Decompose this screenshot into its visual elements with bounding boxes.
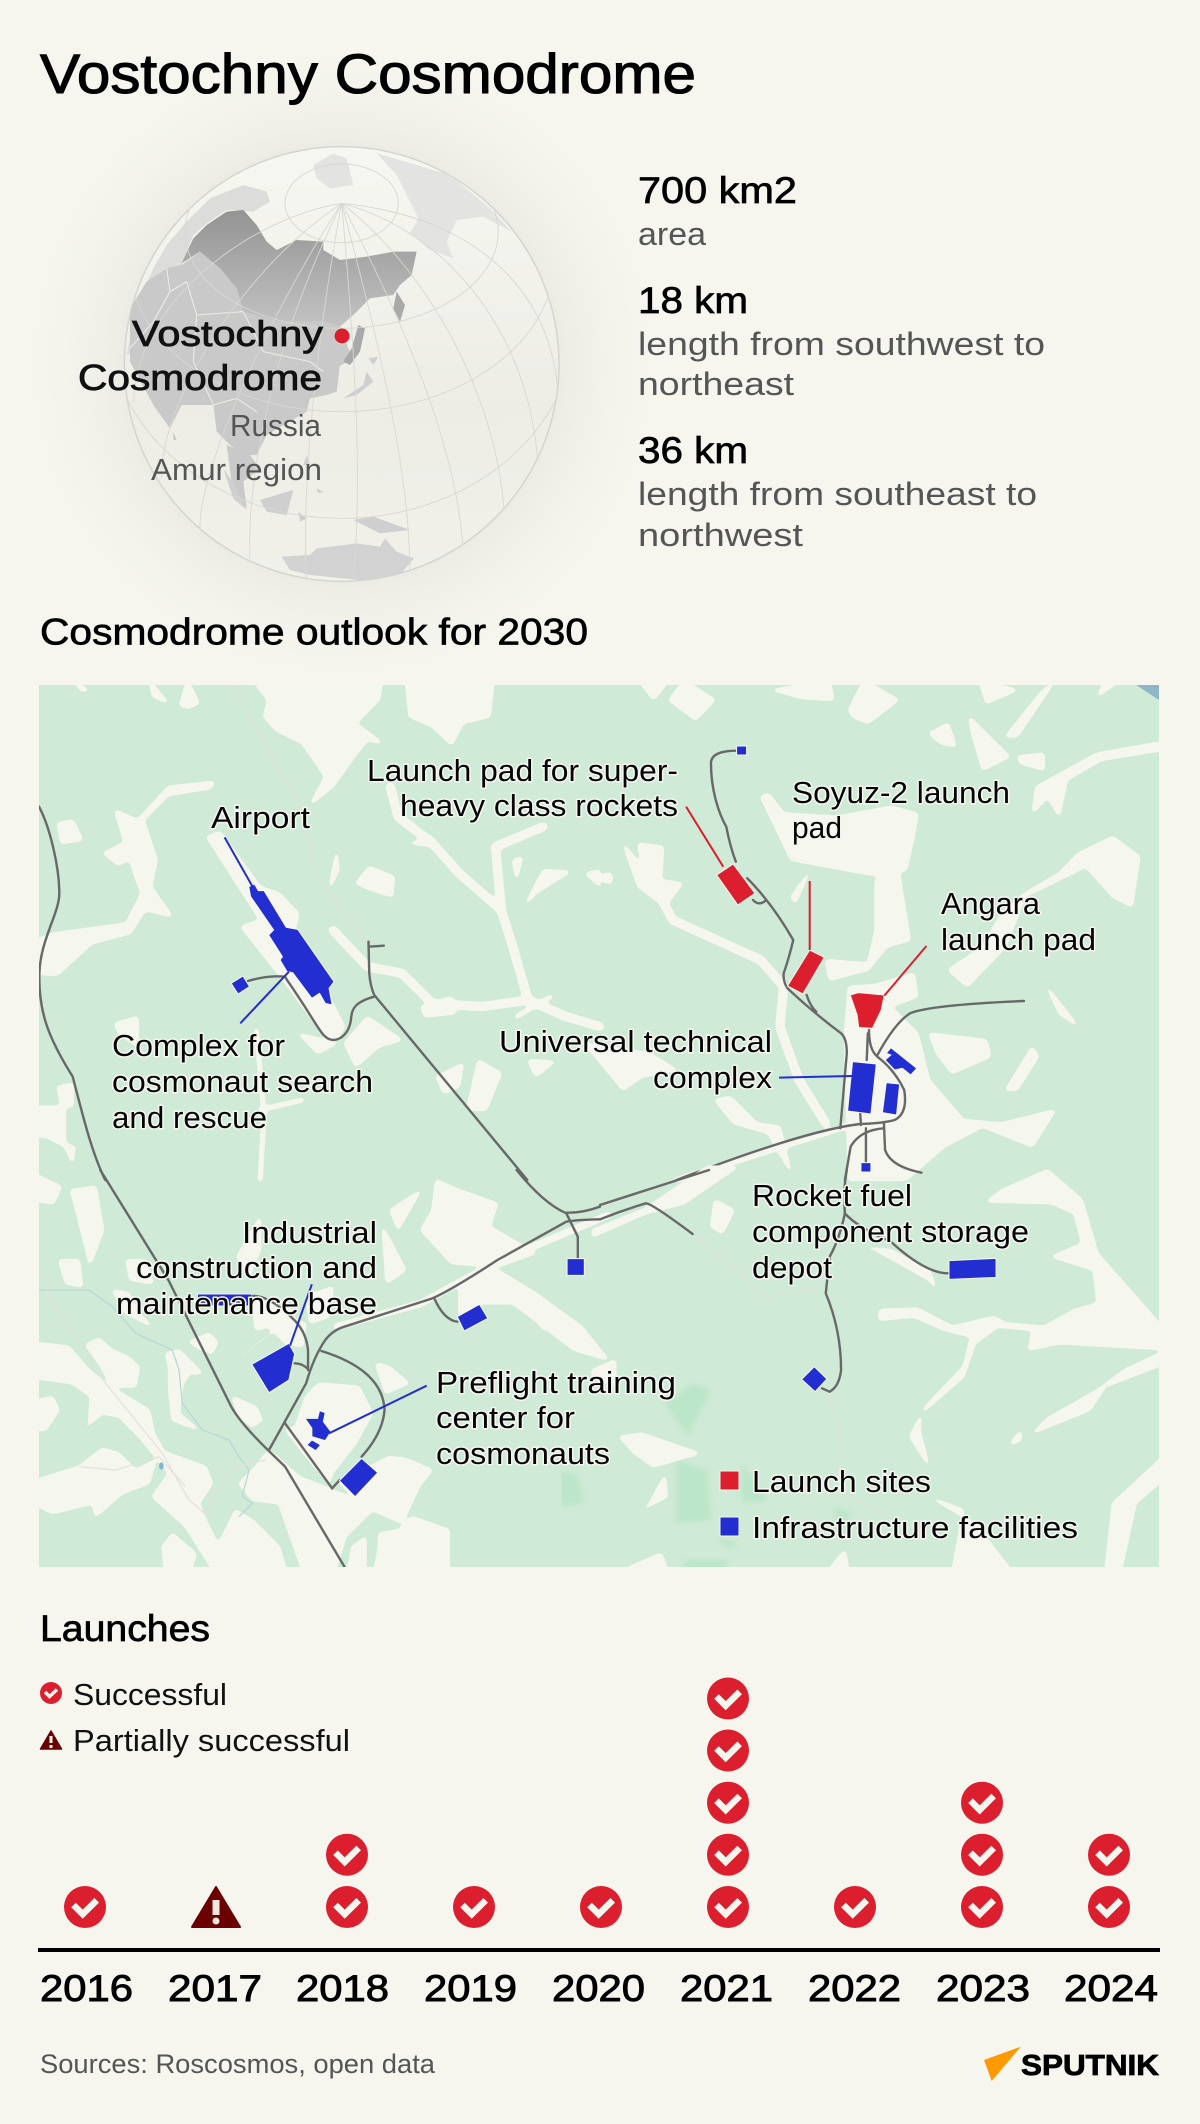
label: Angara launch pad: Angara: [941, 886, 1041, 921]
label: fuel storage depot: Rocket fuel: [752, 1178, 912, 1213]
figure: southwest to northeast length: 18 km: [638, 280, 748, 321]
label: industrial base: maintenance base: [116, 1286, 377, 1321]
label: super-heavy launch pad: heavy class rockets: [400, 788, 678, 823]
column 2019: [453, 1886, 495, 1928]
label: preflight training center: cosmonauts: [436, 1436, 610, 1471]
label: preflight training center: Preflight training: [436, 1365, 676, 1400]
figure: southeast to northwest length: 36 km: [638, 430, 748, 471]
label: Soyuz-2 launch pad: Soyuz-2 launch: [792, 775, 1010, 810]
map panel: [26, 680, 1174, 1580]
map legend: [720, 1464, 1078, 1545]
hidden facility strip: [197, 1294, 252, 1306]
label: fuel storage depot: [752, 1178, 1029, 1285]
label: airport: Airport: [211, 800, 310, 835]
label: universal technical complex: Universal technical: [499, 1024, 772, 1059]
label: Soyuz-2 launch pad: [792, 775, 1010, 845]
infrastructure facilities southwest: [307, 1259, 584, 1497]
year labels: 2022: [808, 1968, 901, 2009]
southeast roads and facilities: [600, 1170, 996, 1517]
launches legend: Partially successful: [73, 1723, 350, 1758]
land clearings southeast: [592, 1167, 1174, 1573]
river and thin tracks southwest: [39, 1270, 266, 1520]
red leader lines: [686, 807, 926, 996]
label: preflight training center: [436, 1365, 676, 1471]
sources: Sources: Roscosmos, open data: [40, 2049, 436, 2079]
key figures: [638, 170, 1045, 553]
Sputnik logo: SPUTNIK: [1021, 2050, 1159, 2082]
label: cosmonaut search and rescue: and rescue: [112, 1100, 267, 1135]
title: Vostochny Cosmodrome: [40, 42, 696, 105]
section heading: launches: Launches: [40, 1608, 210, 1649]
label: fuel storage depot: component storage: [752, 1214, 1029, 1249]
label: cosmonaut search and rescue: cosmonaut search: [112, 1064, 373, 1099]
blue leader lines: [290, 1284, 427, 1433]
land clearings southwest lower: [26, 1260, 449, 1580]
column 2018: [326, 1834, 368, 1928]
facility: fuel storage depot: [949, 1258, 996, 1279]
section heading: outlook: Cosmodrome outlook for 2030: [40, 612, 588, 652]
column 2016: [64, 1886, 106, 1928]
column 2023: [961, 1782, 1003, 1928]
year labels: 2019: [424, 1968, 517, 2009]
launch pad: super-heavy: [717, 864, 755, 905]
column 2021: [707, 1678, 749, 1928]
globe labels: Vostochny: [132, 313, 323, 354]
label: universal technical complex: [499, 1024, 773, 1095]
land clearings southwest upper: [27, 1170, 608, 1360]
label: Angara launch pad: [941, 886, 1096, 957]
globe labels: Amur region: [151, 452, 322, 487]
label: industrial base: construction and: [136, 1250, 377, 1285]
label: industrial base: Industrial: [242, 1215, 377, 1250]
launches chart: [38, 1678, 1160, 2009]
label: fuel storage depot: depot: [752, 1250, 832, 1285]
year labels: 2020: [552, 1968, 645, 2009]
water corner: [1136, 685, 1159, 700]
year labels: [40, 1968, 1158, 2009]
year labels: 2021: [680, 1968, 773, 2009]
label: industrial base: [116, 1215, 377, 1321]
year labels: 2018: [296, 1968, 389, 2009]
facility: southern outpost: [802, 1367, 827, 1392]
globe labels: Cosmodrome: [78, 357, 322, 398]
year labels: 2023: [936, 1968, 1030, 2009]
figure: southwest to northeast length: northeast: [638, 366, 794, 402]
facility: preflight training center: [305, 1411, 331, 1441]
land clearings northwest: [27, 680, 600, 1180]
launch pad: Soyuz-2: [787, 950, 824, 994]
column 2024: [1088, 1834, 1130, 1928]
Sputnik logo: [984, 2047, 1159, 2082]
column 2020: [580, 1886, 622, 1928]
label: universal technical complex: complex: [653, 1060, 773, 1095]
figure: southeast to northwest length: [638, 430, 1037, 553]
column 2017: partial: [192, 1887, 240, 1927]
figure: southeast to northwest length: northwest: [638, 517, 803, 553]
label: cosmonaut search and rescue: Complex for: [112, 1028, 285, 1063]
label: cosmonaut search and rescue: [112, 1028, 373, 1135]
leader lines: [225, 837, 289, 1023]
map legend: Infrastructure facilities: [752, 1510, 1078, 1545]
globe labels: [78, 313, 323, 487]
launches legend: Successful: [73, 1677, 227, 1712]
facility: airport: [249, 884, 334, 1005]
infrastructure facilities northeast: [737, 746, 917, 1172]
map labels: [112, 753, 1096, 1471]
year labels: 2017: [168, 1968, 262, 2009]
facility: industrial base: [252, 1343, 295, 1393]
label: super-heavy launch pad: [367, 753, 678, 823]
figure: southeast to northwest length: length from southeast to: [638, 476, 1037, 512]
year labels: 2024: [1064, 1968, 1158, 2009]
label: preflight training center: center for: [436, 1400, 575, 1435]
darker forest patches: [562, 1384, 850, 1567]
land clearings northeast: [585, 680, 1174, 1180]
location marker: [334, 328, 350, 344]
figure: southwest to northeast length: [638, 280, 1045, 402]
year labels: 2016: [40, 1968, 133, 2009]
figure: area: [638, 170, 797, 252]
globe labels: Russia: [230, 408, 322, 443]
column 2022: [834, 1886, 876, 1928]
map legend: Launch sites: [752, 1464, 931, 1499]
southwest roads and facilities: [100, 1170, 600, 1567]
launches legend: [40, 1677, 350, 1758]
label: Angara launch pad: launch pad: [941, 922, 1096, 957]
figure: area: area: [638, 216, 706, 252]
globe locator: [80, 135, 572, 594]
figure: southwest to northeast length: length from southwest to: [638, 326, 1045, 362]
thin tracks northwest: [233, 685, 367, 943]
facility: cosmonaut search and rescue: [231, 976, 249, 994]
blue leader line: [779, 1076, 852, 1078]
label: Soyuz-2 launch pad: pad: [792, 810, 842, 845]
northwest roads and facilities: [39, 807, 527, 1180]
globe sphere with land: [124, 146, 560, 582]
launch pad: Angara: [850, 993, 884, 1028]
northeast roads and facilities: [677, 685, 1159, 1180]
figure: area: 700 km2: [638, 170, 797, 211]
label: super-heavy launch pad: Launch pad for super-: [367, 753, 678, 788]
